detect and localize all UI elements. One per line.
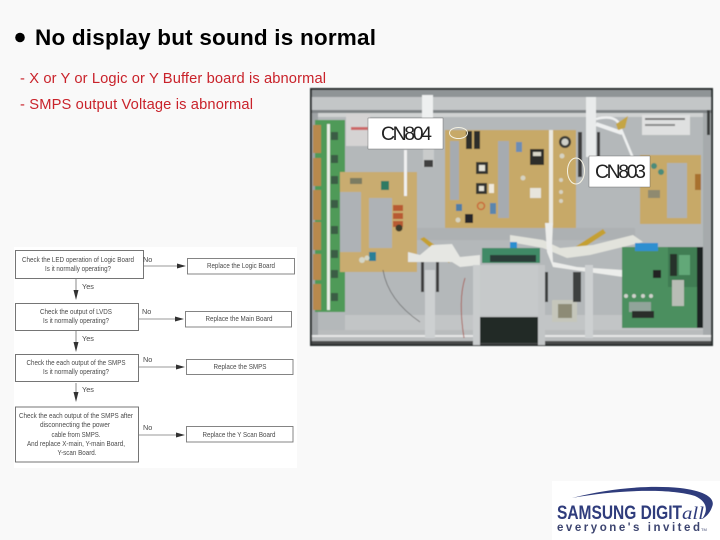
arrow: step 3 no	[139, 355, 185, 370]
label: CN804: CN804	[381, 123, 432, 145]
flow step 1: logic board check	[16, 250, 144, 278]
flow result: replace logic board: Replace the Logic Board	[207, 261, 275, 270]
flow step 4: SMPS check after disconnect: cable from SMPS.	[52, 430, 100, 439]
flow step 1: logic board check: Is it normally operating?	[45, 264, 111, 273]
flow step 4: SMPS check after disconnect: Check the each output of the SMPS after	[19, 411, 133, 420]
flow result: replace SMPS: Replace the SMPS	[214, 362, 267, 371]
label: CN804	[368, 118, 443, 149]
flow result: replace Y scan board	[186, 426, 293, 442]
cause: SMPS voltage abnormal: - SMPS output Voltage is abnormal	[20, 97, 253, 113]
arrow: step 1 yes: Yes	[82, 282, 94, 291]
flow step 3: SMPS output check: Check the each output of the SMPS	[26, 358, 126, 367]
arrow: step 2 no: No	[142, 307, 151, 316]
marker: CN804 ellipse	[450, 128, 468, 138]
arrow: step 2 yes	[74, 331, 94, 352]
logo script: all: all	[682, 503, 704, 523]
photo: TV internal boards	[310, 88, 713, 346]
symptom causes text	[20, 71, 326, 113]
marker: CN803 ellipse	[568, 158, 584, 184]
flow result: replace logic board	[188, 258, 294, 274]
arrow: step 3 yes	[74, 383, 94, 402]
label: CN803	[589, 156, 650, 187]
arrow: step 1 yes	[74, 279, 94, 300]
arrow: step 2 no	[139, 307, 184, 322]
flow result: replace main board: Replace the Main Board	[206, 314, 272, 323]
flow result: replace main board	[186, 312, 292, 327]
arrow: step 4 no: No	[143, 423, 152, 432]
logo swoosh	[572, 487, 713, 519]
title: No display but sound is normal	[35, 25, 376, 50]
flow step 2: LVDS check: Is it normally operating?	[43, 316, 109, 325]
arrow: step 1 no	[143, 255, 186, 268]
arrow: step 4 no	[139, 423, 185, 438]
flow result: replace SMPS	[186, 360, 293, 374]
label: CN803: CN803	[595, 161, 646, 183]
flow result: replace Y scan board: Replace the Y Scan Board	[202, 430, 276, 439]
logo trademark: TM	[701, 527, 707, 532]
logo: Samsung Digitall	[552, 481, 720, 540]
arrow: step 3 no: No	[143, 355, 152, 364]
flow step 4: SMPS check after disconnect	[16, 407, 138, 462]
flow step 2: LVDS check	[16, 304, 138, 330]
arrow: step 2 yes: Yes	[82, 334, 94, 343]
arrow: step 1 no: No	[143, 255, 152, 264]
flow step 4: SMPS check after disconnect: Y-scan Board.	[58, 448, 96, 457]
flow step 2: LVDS check: Check the output of LVDS	[40, 307, 112, 316]
flow step 4: SMPS check after disconnect: And replace X-main, Y-main Board,	[27, 439, 125, 448]
arrow: step 3 yes: Yes	[82, 385, 94, 394]
cause: boards abnormal: - X or Y or Logic or Y Buffer board is abnormal	[20, 71, 326, 87]
flow step 4: SMPS check after disconnect: disconnecting the power	[40, 420, 110, 429]
logo wordmark: SAMSUNG DIGIT	[557, 503, 682, 524]
flow step 1: logic board check: Check the LED operation of Logic Board	[22, 255, 134, 264]
flow step 3: SMPS output check	[16, 354, 138, 382]
logo tagline: everyone's invited	[557, 522, 700, 534]
flowchart	[14, 247, 297, 468]
flow step 3: SMPS output check: Is it normally operating?	[43, 367, 109, 376]
